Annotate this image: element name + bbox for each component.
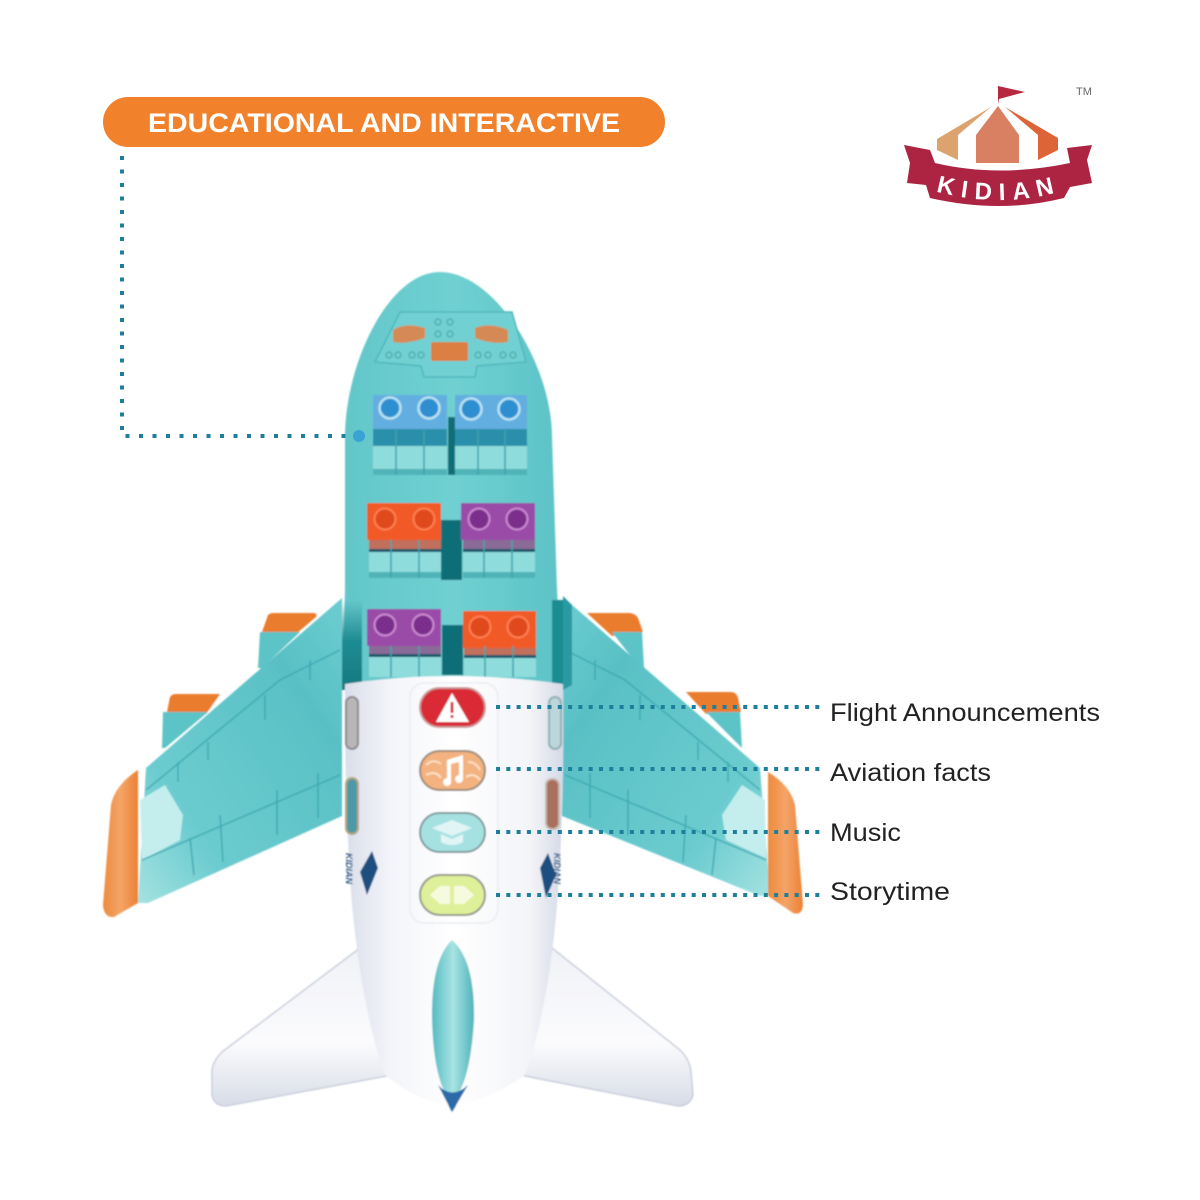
- right tail wing: [520, 948, 693, 1106]
- logo ribbon: [904, 145, 1092, 206]
- seat row 3: purple and orange: [367, 609, 536, 677]
- label: aviation facts: Aviation facts: [830, 759, 991, 787]
- engines behind wings: [162, 613, 742, 748]
- sticker text left: KIDIAN: [344, 853, 354, 884]
- button: storytime: [420, 875, 485, 915]
- left tail wing: [212, 948, 392, 1106]
- right wing: [562, 598, 803, 914]
- trademark: TM: [1076, 86, 1092, 98]
- label: flight announcements: Flight Announcements: [830, 699, 1100, 727]
- heading badge: EDUCATIONAL AND INTERACTIVE: [148, 108, 620, 138]
- airplane toy: [103, 272, 803, 1112]
- fuselage: [345, 676, 563, 1106]
- seat row 2: orange and purple: [367, 503, 535, 580]
- sticker text right: KIDIAN: [552, 853, 562, 884]
- cockpit panel: [375, 312, 526, 377]
- dotted connector from heading to plane: [122, 156, 365, 442]
- label: storytime: Storytime: [830, 878, 950, 906]
- tail fin: [432, 940, 474, 1112]
- logo flag: [998, 86, 1025, 104]
- left wing: [103, 598, 342, 917]
- button: aviation facts: [420, 751, 485, 790]
- callout lines: [496, 707, 820, 895]
- logo tent: [937, 106, 1058, 163]
- seat row 1: blue: [373, 395, 527, 475]
- logo: Kidian: [904, 86, 1092, 206]
- open upper hull: [342, 272, 572, 690]
- button: flight announcements: [420, 688, 485, 727]
- heading badge: [103, 97, 665, 147]
- label: music: Music: [830, 819, 901, 847]
- callout labels: [830, 699, 1100, 906]
- button: music: [420, 813, 485, 852]
- logo wordmark: KIDIAN: [937, 176, 1054, 200]
- fuselage brand marks: [344, 851, 562, 898]
- fuselage window stickers: [346, 697, 561, 834]
